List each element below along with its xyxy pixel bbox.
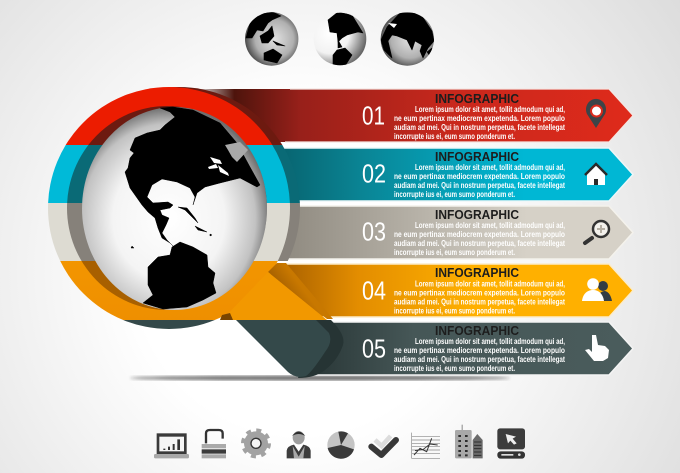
number: 04 <box>362 276 386 306</box>
icon: open lock <box>202 430 226 458</box>
heading: INFOGRAPHIC <box>435 91 520 106</box>
text block: ne eum pertinax mediocrem expetenda. Lorem populo <box>394 114 565 123</box>
icon: location pin <box>586 99 606 128</box>
icon: line chart <box>412 433 440 458</box>
small globes row <box>245 12 434 66</box>
panel: 02 <box>250 148 633 201</box>
panel: 03 <box>270 206 633 259</box>
panel: 04 <box>260 264 633 317</box>
ground shadow <box>130 376 510 380</box>
icon: house <box>585 164 607 185</box>
handle shadow <box>298 320 344 378</box>
icon: buildings <box>455 425 483 458</box>
text block <box>394 221 565 257</box>
icon: magnifier <box>585 221 609 243</box>
text block: ne eum pertinax mediocrem expetenda. Lorem populo <box>394 172 565 181</box>
ring shadow <box>171 87 300 261</box>
text block: ne eum pertinax mediocrem expetenda. Lorem populo <box>394 288 565 298</box>
text block <box>394 280 565 316</box>
text block: audiam ad mei. Qui in nostrum perpetua, facete intellegat <box>394 355 565 364</box>
icon: people <box>582 278 612 301</box>
handle <box>220 263 333 377</box>
text block: audiam ad mei. Qui in nostrum perpetua, facete intellegat <box>394 298 565 306</box>
text block: Lorem ipsum dolor sit amet, tollit admodum qui ad, <box>415 337 565 346</box>
text block: Lorem ipsum dolor sit amet, tollit admodum qui ad, <box>415 280 565 288</box>
ring <box>48 87 290 329</box>
heading: INFOGRAPHIC <box>435 265 520 280</box>
icon: laptop chart <box>154 433 189 458</box>
text block: Lorem ipsum dolor sit amet, tollit admodum qui ad, <box>415 221 565 230</box>
text block <box>394 163 565 199</box>
text block: incorrupte ius ei, eum sumo ponderum et. <box>394 190 515 199</box>
continent: South America <box>143 242 216 309</box>
magnifier graphic <box>48 87 344 378</box>
globe: Americas <box>314 12 366 66</box>
icon row <box>154 425 525 459</box>
heading: INFOGRAPHIC <box>435 323 520 338</box>
text block: Lorem ipsum dolor sit amet, tollit admodum qui ad, <box>415 163 565 172</box>
text block: audiam ad mei. Qui in nostrum perpetua, facete intellegat <box>394 123 565 132</box>
icon: check mark <box>371 436 396 455</box>
panel: 01 <box>190 89 633 142</box>
ring inner shadow <box>67 106 267 310</box>
panel: 05 <box>310 322 633 375</box>
icon: businessman <box>287 431 311 458</box>
number: 02 <box>362 158 386 188</box>
text block: incorrupte ius ei, eum sumo ponderum et. <box>394 132 515 141</box>
text block: ne eum pertinax mediocrem expetenda. Lorem populo <box>394 230 565 239</box>
continent: North America <box>125 107 260 247</box>
text block: audiam ad mei. Qui in nostrum perpetua, facete intellegat <box>394 181 565 190</box>
globe: Asia and Australia <box>245 12 298 66</box>
icon: gear <box>244 431 268 456</box>
number: 05 <box>362 334 386 364</box>
text block <box>394 337 565 373</box>
text block: Lorem ipsum dolor sit amet, tollit admodum qui ad, <box>415 105 565 114</box>
text block: incorrupte ius ei, eum sumo ponderum et. <box>394 306 515 316</box>
Caribbean islands <box>131 207 212 248</box>
text block: audiam ad mei. Qui in nostrum perpetua, facete intellegat <box>394 239 565 248</box>
heading: INFOGRAPHIC <box>435 207 520 222</box>
text block <box>394 105 565 141</box>
text block: ne eum pertinax mediocrem expetenda. Lorem populo <box>394 346 565 355</box>
heading: INFOGRAPHIC <box>435 149 520 164</box>
icon: pie chart <box>327 431 355 459</box>
icon: pointing hand <box>585 335 609 361</box>
icon: computer <box>497 428 525 459</box>
lakes <box>208 157 229 176</box>
globe <box>82 107 267 310</box>
text block: incorrupte ius ei, eum sumo ponderum et. <box>394 248 515 257</box>
globe: Europe, Africa and India <box>381 12 434 66</box>
text block: incorrupte ius ei, eum sumo ponderum et. <box>394 364 515 373</box>
number: 03 <box>362 216 386 246</box>
bay <box>225 142 248 162</box>
number: 01 <box>362 100 385 130</box>
